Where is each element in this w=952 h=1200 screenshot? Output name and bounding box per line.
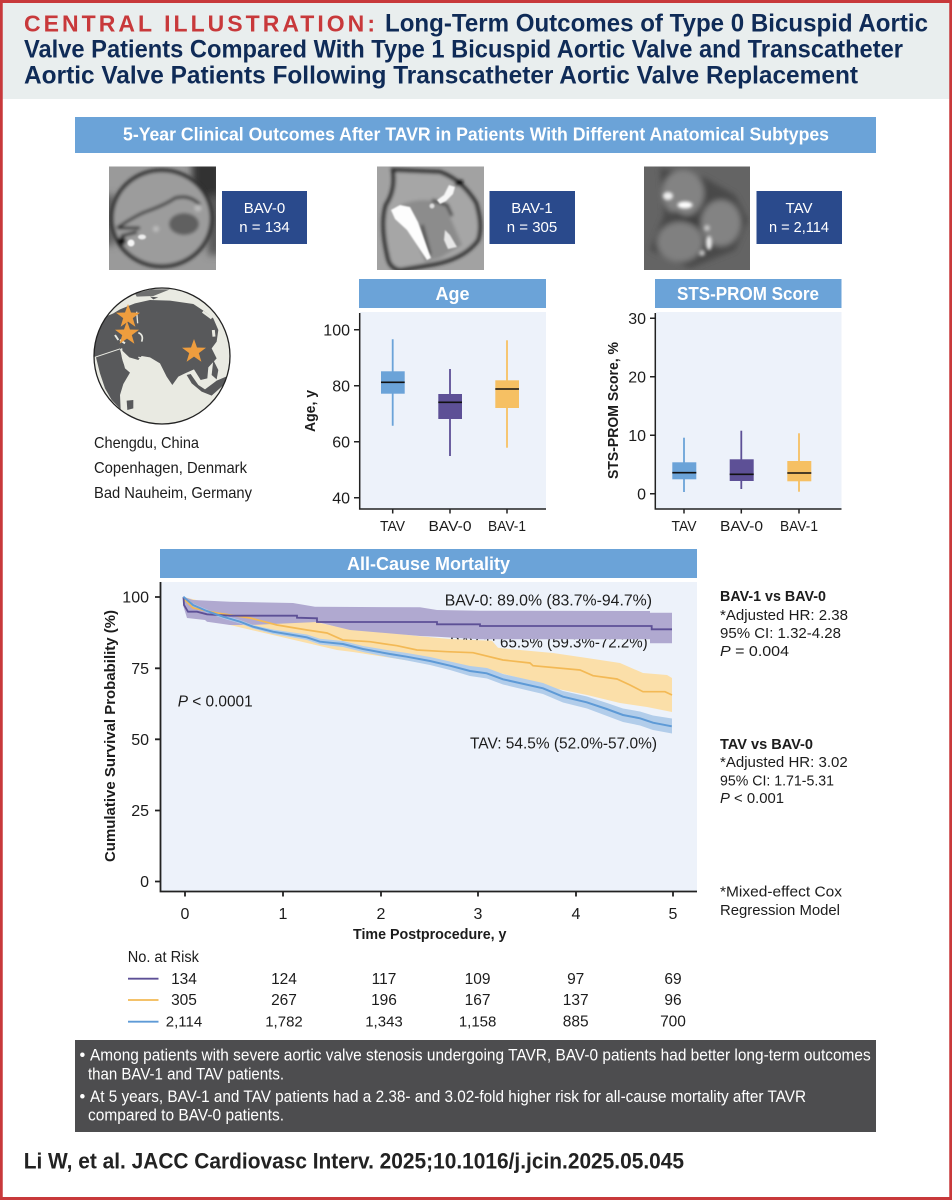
panel: age box plot: 40 bbox=[332, 490, 350, 508]
citation: Li W, et al. JACC Cardiovasc Interv. 2025;10.1016/j.jcin.2025.05.045 bbox=[24, 1148, 684, 1174]
statistics: BAV-1 vs BAV-0: BAV-1 vs BAV-0 bbox=[720, 588, 826, 605]
curve: TAV bbox=[183, 597, 672, 726]
panel: age box plot: 100 bbox=[323, 322, 350, 340]
statistics: TAV vs BAV-0: TAV vs BAV-0 bbox=[720, 736, 813, 753]
label: BAV-1 bbox=[490, 191, 575, 244]
key findings box bbox=[75, 1040, 876, 1132]
panel: all-cause mortality chart: 1 bbox=[279, 906, 288, 923]
statistics: TAV vs BAV-0: 95% CI: 1.71-5.31 bbox=[720, 772, 834, 790]
heading: STS-PROM Score: STS-PROM Score bbox=[677, 284, 819, 304]
statistics: BAV-1 vs BAV-0: P = 0.004 bbox=[720, 643, 789, 660]
table: number at risk: 97 bbox=[567, 971, 584, 988]
heading: All-Cause Mortality bbox=[160, 549, 697, 578]
section banner bbox=[75, 117, 876, 153]
table: number at risk: 196 bbox=[371, 992, 397, 1009]
study sites list bbox=[94, 435, 252, 502]
panel: all-cause mortality chart: 25 bbox=[131, 803, 149, 820]
panel: age box plot: BAV-1 bbox=[488, 518, 526, 535]
table: number at risk: 137 bbox=[563, 992, 589, 1009]
panel: all-cause mortality chart: 0 bbox=[140, 874, 149, 891]
table: number at risk: 96 bbox=[664, 992, 682, 1009]
label: BAV-1 survival: BAV-1: 65.5% (59.3%-72.2%) bbox=[450, 635, 648, 652]
panel: all-cause mortality chart: 0 bbox=[181, 906, 190, 923]
statistics: TAV vs BAV-0: *Adjusted HR: 3.02 bbox=[720, 754, 848, 771]
key findings box: compared to BAV-0 patients. bbox=[88, 1107, 284, 1125]
header band bbox=[2, 3, 950, 99]
panel: all-cause mortality chart: 5 bbox=[669, 906, 678, 923]
panel: all-cause mortality chart: Time Postprocedure, y bbox=[353, 926, 507, 943]
label: BAV-0: n = 134 bbox=[239, 219, 290, 236]
key findings box: Among patients with severe aortic valve stenosis undergoing TAVR, BAV-0 patients had better long-term outcomes bbox=[90, 1047, 871, 1065]
panel: all-cause mortality chart: 4 bbox=[572, 906, 581, 923]
footnote: model: *Mixed-effect Cox bbox=[720, 884, 843, 900]
box: BAV-0 age bbox=[438, 369, 462, 456]
box: BAV-0 STS bbox=[730, 431, 754, 489]
label: BAV-1: BAV-1 bbox=[511, 200, 553, 217]
panel: STS-PROM box plot: 20 bbox=[628, 370, 646, 386]
statistics: BAV-1 vs BAV-0: 95% CI: 1.32-4.28 bbox=[720, 625, 841, 642]
confidence band: BAV-1 bbox=[184, 597, 672, 712]
label: TAV survival: TAV: 54.5% (52.0%-57.0%) bbox=[470, 736, 657, 752]
table: number at risk: 267 bbox=[271, 992, 297, 1009]
curve: BAV-0 bbox=[184, 597, 672, 629]
panel: all-cause mortality chart: 100 bbox=[122, 590, 149, 606]
table: number at risk: 885 bbox=[563, 1014, 589, 1030]
footnote: model: Regression Model bbox=[720, 902, 840, 919]
table: number at risk: 1,343 bbox=[365, 1014, 403, 1030]
table: number at risk: 109 bbox=[465, 971, 491, 988]
label: p value: P < 0.0001 bbox=[178, 694, 253, 711]
panel: STS-PROM box plot: 30 bbox=[628, 311, 646, 328]
panel: age box plot: BAV-0 bbox=[428, 518, 472, 535]
CT image: BAV-0 bbox=[109, 166, 216, 270]
statistics: BAV-1 vs BAV-0 bbox=[720, 588, 848, 660]
panel: all-cause mortality chart: 3 bbox=[474, 906, 483, 923]
panel: age box plot bbox=[303, 279, 546, 535]
study sites list: Chengdu, China bbox=[94, 435, 199, 452]
panel: age box plot: Age, y bbox=[303, 390, 319, 432]
table: number at risk: 69 bbox=[664, 971, 682, 988]
heading: STS-PROM Score bbox=[655, 279, 842, 308]
label: BAV-0 survival: BAV-0: 89.0% (83.7%-94.7%) bbox=[445, 593, 652, 610]
table: number at risk: 700 bbox=[660, 1014, 686, 1030]
panel: STS-PROM box plot: BAV-0 bbox=[720, 518, 763, 535]
box: BAV-1 STS bbox=[787, 433, 811, 492]
panel: STS-PROM box plot: TAV bbox=[672, 518, 696, 535]
icon: star Chengdu bbox=[182, 339, 206, 362]
title: Aortic Valve Patients Following Transcatheter Aortic Valve Replacement bbox=[24, 62, 859, 90]
confidence band: TAV bbox=[184, 596, 672, 734]
title: Valve Patients Compared With Type 1 Bicuspid Aortic Valve and Transcatheter bbox=[24, 36, 903, 64]
CT image: BAV-1 bbox=[377, 166, 484, 270]
CT image: TAV bbox=[644, 166, 750, 270]
panel: STS-PROM box plot: BAV-1 bbox=[780, 518, 818, 535]
box: TAV STS bbox=[672, 438, 696, 492]
key findings box: At 5 years, BAV-1 and TAV patients had a 2.38- and 3.02-fold higher risk for all-cause mortality after TAVR bbox=[90, 1088, 806, 1106]
heading: Age: Age bbox=[435, 284, 470, 304]
panel: all-cause mortality chart: 75 bbox=[131, 661, 149, 678]
title: Long-Term Outcomes of Type 0 Bicuspid Aortic bbox=[385, 10, 928, 38]
panel: all-cause mortality chart bbox=[102, 549, 697, 943]
table: number at risk: 124 bbox=[271, 971, 297, 988]
study sites list: Bad Nauheim, Germany bbox=[94, 485, 252, 502]
title: CENTRAL ILLUSTRATION: bbox=[24, 10, 375, 36]
statistics: BAV-1 vs BAV-0: *Adjusted HR: 2.38 bbox=[720, 607, 848, 624]
box: TAV age bbox=[381, 339, 405, 426]
icon: globe with study sites bbox=[90, 288, 230, 424]
label: TAV: n = 2,114 bbox=[769, 219, 829, 236]
confidence band: BAV-0 bbox=[183, 597, 672, 643]
panel: STS-PROM box plot: 10 bbox=[628, 428, 646, 445]
table: number at risk bbox=[128, 949, 686, 1030]
heading: Age bbox=[359, 279, 546, 308]
panel: all-cause mortality chart: Cumulative Survival Probability (%) bbox=[102, 610, 119, 862]
section banner: 5-Year Clinical Outcomes After TAVR in Patients With Different Anatomical Subtypes bbox=[123, 124, 829, 144]
key findings box: • bbox=[80, 1088, 86, 1106]
box: BAV-1 age bbox=[495, 340, 519, 448]
icon: star Bad Nauheim bbox=[115, 321, 139, 344]
study sites list: Copenhagen, Denmark bbox=[94, 460, 248, 477]
key findings box: • bbox=[80, 1047, 86, 1065]
label: TAV bbox=[756, 191, 842, 244]
icon: star Copenhagen bbox=[116, 304, 140, 327]
statistics: TAV vs BAV-0 bbox=[720, 736, 848, 807]
curve: BAV-1 bbox=[183, 598, 672, 695]
heading: All-Cause Mortality: All-Cause Mortality bbox=[347, 554, 510, 574]
table: number at risk: 117 bbox=[372, 971, 396, 988]
table: number at risk: No. at Risk bbox=[128, 949, 199, 966]
panel: all-cause mortality chart: 2 bbox=[377, 906, 386, 923]
panel: STS-PROM box plot: 0 bbox=[637, 486, 646, 504]
panel: all-cause mortality chart: 50 bbox=[131, 732, 149, 749]
panel: age box plot: 60 bbox=[332, 434, 350, 452]
footnote: model bbox=[720, 884, 843, 919]
title bbox=[24, 10, 928, 90]
label: TAV: TAV bbox=[786, 200, 812, 217]
panel: age box plot: 80 bbox=[332, 378, 350, 396]
table: number at risk: 134 bbox=[171, 971, 197, 988]
table: number at risk: 1,782 bbox=[265, 1014, 303, 1030]
panel: STS-PROM box plot: STS-PROM Score, % bbox=[606, 342, 622, 479]
label: BAV-0 bbox=[222, 191, 307, 244]
label: BAV-1: n = 305 bbox=[507, 219, 557, 236]
statistics: TAV vs BAV-0: P < 0.001 bbox=[720, 790, 784, 807]
table: number at risk: 2,114 bbox=[166, 1014, 202, 1030]
panel: age box plot: TAV bbox=[380, 518, 405, 535]
table: number at risk: 167 bbox=[465, 992, 491, 1009]
table: number at risk: 305 bbox=[171, 992, 197, 1009]
table: number at risk: 1,158 bbox=[459, 1014, 496, 1030]
label: BAV-0: BAV-0 bbox=[244, 200, 285, 217]
key findings box: than BAV-1 and TAV patients. bbox=[88, 1066, 284, 1084]
panel: STS-PROM box plot bbox=[606, 279, 842, 535]
